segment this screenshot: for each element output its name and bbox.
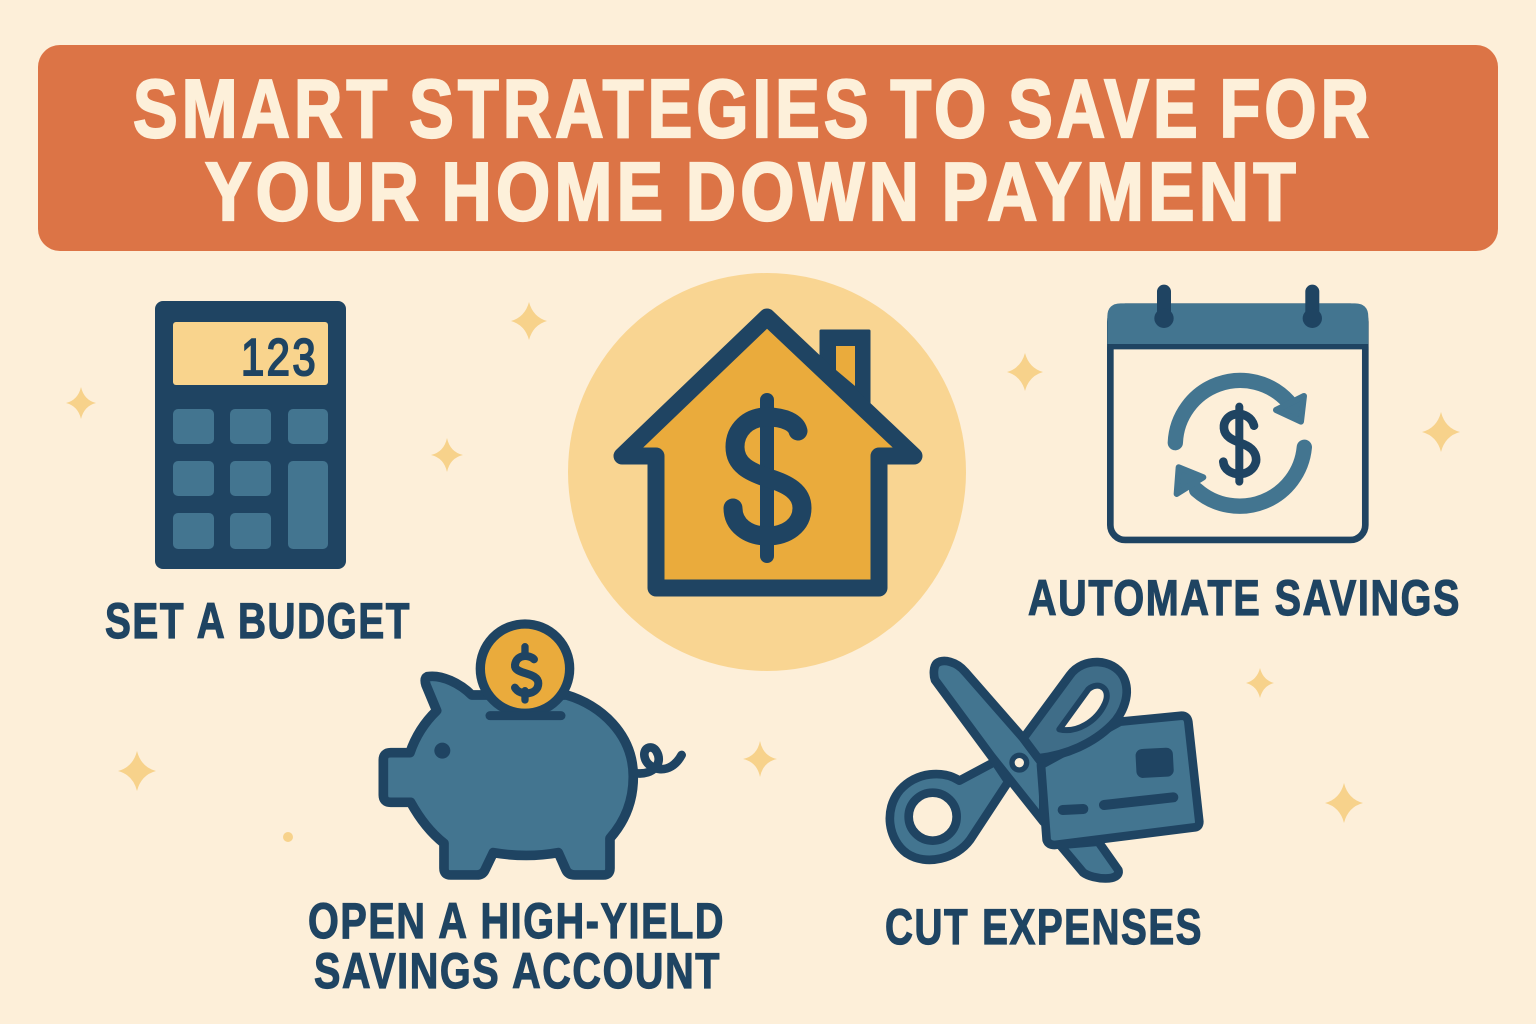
central house icon <box>568 273 966 671</box>
icon: calculator: 123 <box>241 329 318 387</box>
label: cut expenses: CUT EXPENSES <box>885 899 1203 955</box>
label: set a budget: SET A BUDGET <box>105 593 411 649</box>
title banner: YOUR HOME DOWN PAYMENT <box>205 145 1300 238</box>
icon: piggy bank with coin <box>383 624 682 875</box>
decorative sparkles <box>66 302 1460 842</box>
label: open a high-yield savings account: SAVINGS ACCOUNT <box>314 943 721 999</box>
title banner <box>38 45 1498 251</box>
icon: calendar with recurring dollar <box>1107 292 1368 540</box>
icon: scissors cutting credit card <box>890 661 1199 878</box>
label: open a high-yield savings account: OPEN A HIGH-YIELD <box>308 893 725 949</box>
icon: calculator <box>155 301 346 569</box>
label: open a high-yield savings account <box>308 893 725 999</box>
